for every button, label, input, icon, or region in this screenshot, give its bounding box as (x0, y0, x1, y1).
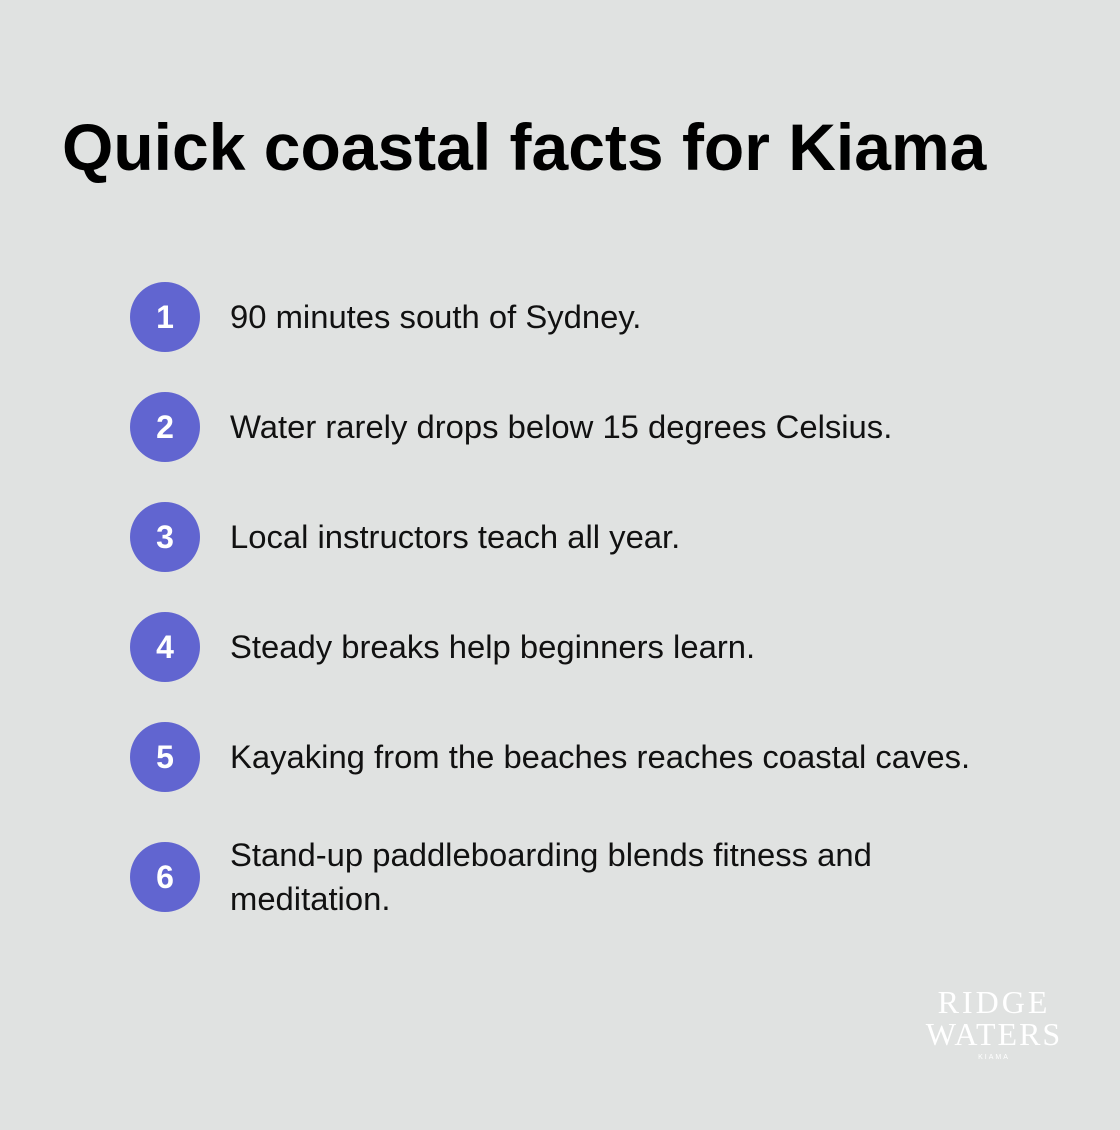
item 5: Kayaking from the beaches reaches coastal caves. (230, 738, 970, 775)
logo (926, 984, 1062, 1061)
title: Quick coastal facts for Kiama (62, 110, 986, 184)
item 3: Local instructors teach all year. (230, 518, 680, 555)
item 2: 2 (156, 409, 174, 445)
item 2 (130, 392, 892, 462)
logo: RIDGE (938, 984, 1050, 1020)
item 3: 3 (156, 519, 174, 555)
item 6: Stand-up paddleboarding blends fitness and meditation. (230, 836, 872, 917)
item 5 (130, 722, 970, 792)
logo: KIAMA (978, 1054, 1010, 1061)
item 6: 6 (156, 859, 174, 895)
item 5: 5 (156, 739, 174, 775)
logo: WATERS (926, 1016, 1062, 1052)
item 4: Steady breaks help beginners learn. (230, 628, 755, 665)
item 3 (130, 502, 680, 572)
item 1: 1 (156, 299, 174, 335)
item 4: 4 (156, 629, 174, 665)
item 4 (130, 612, 755, 682)
item 1: 90 minutes south of Sydney. (230, 298, 641, 335)
item 1 (130, 282, 641, 352)
item 2: Water rarely drops below 15 degrees Celsius. (230, 408, 892, 445)
